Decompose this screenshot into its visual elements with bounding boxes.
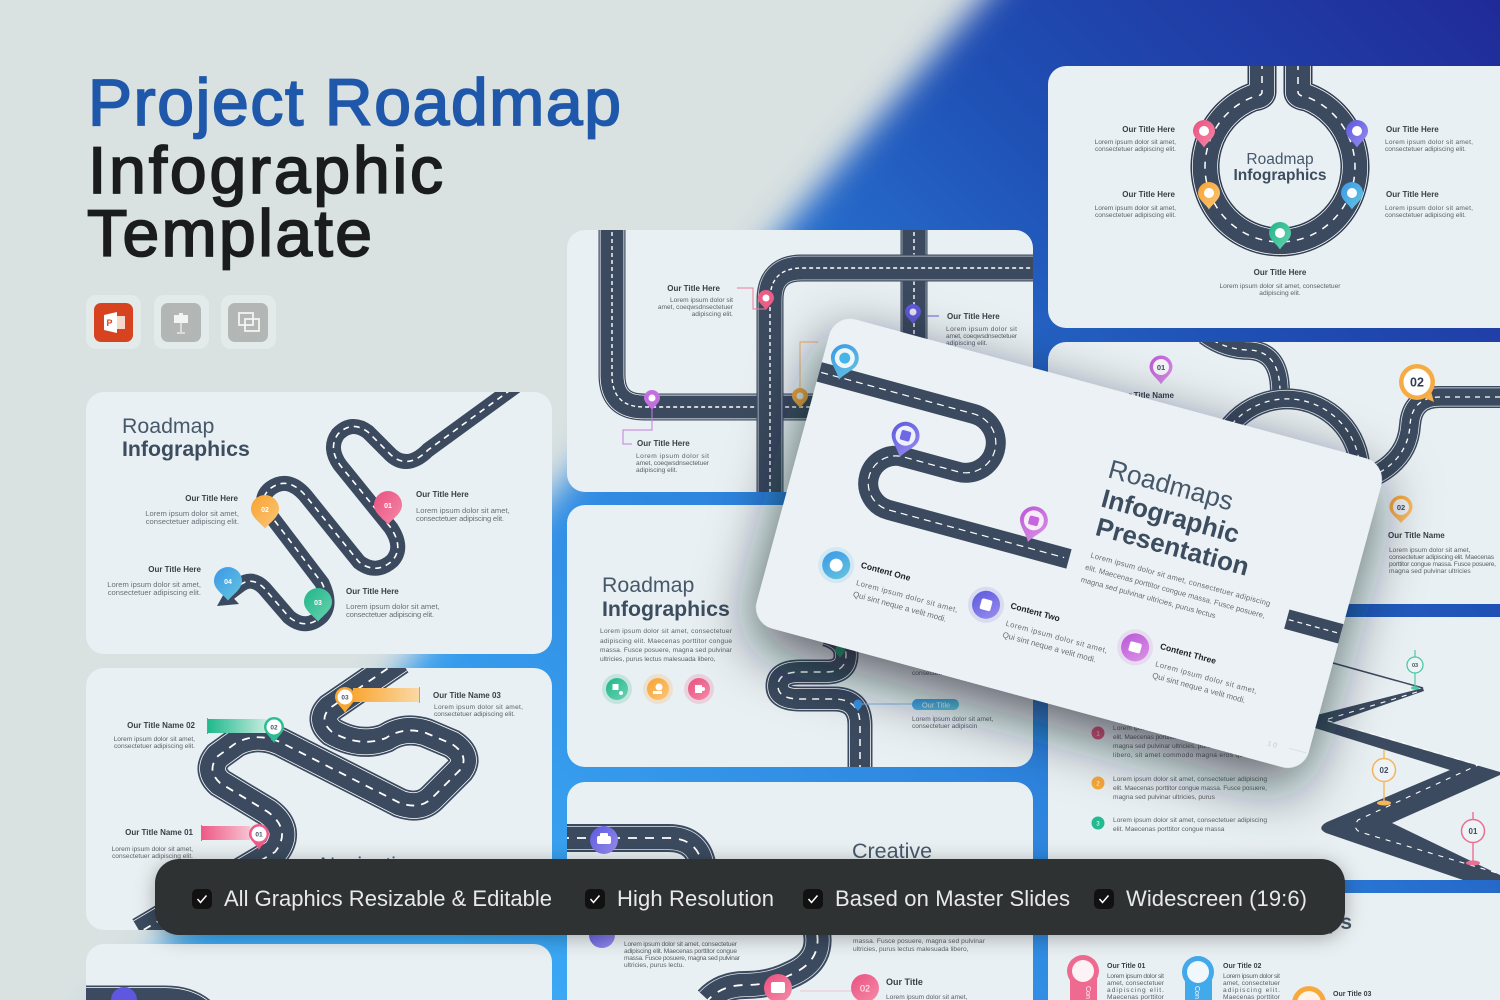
feature: resolution: High Resolution (617, 886, 774, 911)
bullet 3: 3 (1096, 822, 1100, 828)
pin: printer (1014, 503, 1051, 546)
text 02: adipiscing elit. (1223, 987, 1280, 994)
text blocks: consectetuer adipiscing elit. (1095, 146, 1176, 153)
panel: left slide bottom (86, 944, 552, 1000)
arrow head (217, 590, 239, 606)
text: bottom left: adipiscing elit. (636, 467, 678, 474)
content one: Qui sint neque a velit modi. (852, 590, 948, 624)
heading: Roadmaps (1105, 454, 1237, 516)
callout bar 03: 03 (341, 694, 349, 702)
text 02 (1223, 963, 1281, 1000)
heading: Infographics (602, 597, 730, 621)
text: top: Lorem ipsum dolor sit (670, 297, 733, 304)
text: right: Lorem ipsum dolor sit (946, 326, 1017, 333)
text 02: consectetuer adipiscing elit. (114, 743, 195, 750)
pin 02 small (1390, 496, 1412, 523)
text 03: consectetuer adipiscing elit. (346, 610, 434, 619)
panel: right slide zigzag road (1048, 617, 1500, 880)
text 01: consectetuer adipiscing elit. (416, 514, 504, 523)
bullet 1: elit. Maecenas porttitor congue massa. Fusce posuere, (1113, 734, 1267, 741)
icon: orange circle (643, 674, 673, 704)
icon: pink circle (684, 674, 714, 704)
pin: indigo (1346, 120, 1368, 148)
badge 01: Con (1084, 986, 1091, 999)
text left: ultricies, purus lectu. (624, 962, 684, 969)
pin 01: 01 (1157, 363, 1165, 372)
pin: indigo (905, 304, 921, 324)
road (228, 383, 520, 624)
text 03: Our Title Name 03 (433, 691, 501, 700)
pin: chart (825, 341, 862, 383)
text 02: Lorem ipsum dolor sit (1223, 973, 1280, 980)
heading (1233, 151, 1327, 184)
bullet 1: libero, sit amet commodo magna eros quis urna. (1113, 752, 1267, 759)
panel: middle slide intro (567, 505, 1033, 772)
page number (1266, 741, 1307, 758)
pin 04: 04 (224, 579, 232, 586)
icon: car badge (590, 826, 618, 854)
paragraph: massa. Fusce posuere, magna sed pulvinar (600, 647, 733, 654)
text blocks: Lorem ipsum dolor sit amet, (1385, 139, 1473, 146)
text 02: Lorem ipsum dolor sit amet, (145, 509, 239, 518)
callout pill: Our Title (922, 700, 950, 710)
road (778, 634, 860, 772)
heading: Creative (852, 839, 932, 863)
text 02: Our Title Name 02 (127, 721, 196, 730)
pin: violet (644, 390, 660, 410)
text blocks: Lorem ipsum dolor sit amet, (1095, 139, 1176, 146)
text 04: consectetuer adipiscing elit. (108, 588, 201, 597)
app icons (86, 295, 276, 349)
text: bottom left: amet, coeqwsdnsectetuer (636, 460, 710, 467)
content three (1111, 625, 1264, 707)
text: 02: magna sed pulvinar ultricies (1389, 568, 1471, 575)
content one (811, 543, 965, 626)
callout text: consectetuer (912, 670, 951, 677)
text right: massa. Fusce posuere, magna sed pulvinar (853, 938, 986, 945)
heading: Infographics (122, 437, 250, 461)
text blocks: Our Title Here (1386, 190, 1439, 199)
text blocks: Our Title Here (1386, 125, 1439, 134)
text 02: Our Title Here (185, 494, 239, 503)
text 03: Our Title 03 (1333, 991, 1371, 998)
text blocks: Lorem ipsum dolor sit amet, (1385, 205, 1473, 212)
content two: Qui sint neque a velit modi. (1002, 630, 1097, 664)
bullet list (1092, 725, 1267, 833)
pin 01 (1462, 812, 1484, 866)
text blocks: Our Title Here (1122, 190, 1176, 199)
text blocks: consectetuer adipiscing elit. (1385, 212, 1466, 219)
text right (853, 938, 986, 953)
panel: middle slide creative (560, 782, 1033, 1000)
callout pill (862, 699, 959, 710)
text right: ultricies, purus lectus malesuada libero, (853, 946, 969, 953)
badge 02: 02 (860, 984, 870, 994)
text 01: Our Title Here (416, 490, 469, 499)
pin 01: 01 (1469, 827, 1478, 836)
callout bar 03 (335, 687, 420, 713)
pin 03: 03 (314, 600, 322, 607)
heading: Roadmap (1246, 151, 1314, 168)
callout bar 01: 01 (255, 832, 263, 838)
text 02: amet, consectetuer (1223, 980, 1281, 987)
icon: PowerPoint: P (106, 318, 113, 328)
text: 01: Our Title Name (1117, 391, 1175, 400)
text: top (658, 284, 734, 318)
heading: Infographics (1233, 167, 1327, 184)
text: right: adipiscing elit. (946, 340, 988, 347)
text 01: amet, consectetuer (1107, 980, 1165, 987)
text: right: amet, coeqwsdnsectetuer (946, 333, 1018, 340)
content two (961, 583, 1115, 667)
text: top: adipiscing elit. (692, 311, 733, 318)
text 04 (107, 565, 202, 597)
text 03 (346, 587, 440, 619)
panel: left slide winding road (86, 383, 552, 654)
pin: blue (1341, 182, 1363, 210)
bullet 1: magna sed pulvinar ultricies, purus lectus malesuada (1113, 743, 1267, 750)
bullet 1 (1092, 725, 1267, 759)
text 01: Lorem ipsum dolor sit (1107, 973, 1164, 980)
title line: Template: Template (87, 196, 372, 270)
panel: middle slide crossing roads (567, 225, 1040, 500)
pin 02: 02 (1380, 766, 1389, 775)
icon: PowerPoint (86, 295, 141, 349)
feature: master slides: Based on Master Slides (835, 886, 1070, 911)
paragraph: ultricies, purus lectus malesuada libero, (600, 656, 716, 663)
pin 02 small: 02 (1397, 503, 1405, 512)
text 03: consectetuer adipiscing elit. (434, 711, 515, 718)
paragraph (1080, 550, 1271, 633)
text 03: Lorem ipsum dolor sit amet, (346, 602, 440, 611)
content one: Content One (860, 560, 912, 583)
badge 01 (1067, 955, 1099, 1000)
text 01 (1107, 963, 1165, 1000)
text blocks: consectetuer adipiscing elit. (1385, 146, 1466, 153)
heading (122, 414, 250, 461)
badge 03 (1292, 986, 1326, 1000)
pin 02 large (1399, 364, 1435, 402)
panel: right slide circle road (1048, 335, 1500, 604)
text 01: Our Title 01 (1107, 963, 1145, 970)
text left (624, 941, 741, 969)
zigzag road (1305, 663, 1500, 880)
text 03: Our Title Here (346, 587, 399, 596)
bullet 2: elit. Maecenas porttitor congue massa. Fusce posuere, (1113, 785, 1267, 792)
feature bar (155, 859, 1345, 935)
pin 03 (304, 588, 332, 622)
feature: resizable: All Graphics Resizable & Editable (224, 886, 552, 911)
text: right: Our Title Here (947, 312, 1000, 321)
text: 02: consectetuer adipiscing elit. Maecenas (1389, 554, 1495, 561)
text 04: Lorem ipsum dolor sit amet, (107, 580, 201, 589)
text 01: Our Title Name 01 (125, 828, 194, 837)
content three: Qui sint neque a velit modi. (1151, 671, 1247, 705)
text: 02 (1388, 531, 1496, 575)
title line: Infographic: Infographic (88, 133, 443, 207)
ring road (1205, 62, 1355, 242)
content two: Content Two (1009, 600, 1061, 623)
heading: Presentation (1093, 512, 1252, 582)
pin 02 (251, 495, 279, 529)
pins (835, 645, 862, 711)
heading: Infographic (1098, 483, 1243, 549)
text left: massa. Fusce posuere, magna sed pulvinar (624, 955, 741, 962)
text 02 (114, 721, 196, 750)
heading: Roadmap (122, 414, 214, 438)
pin: orange (792, 388, 808, 408)
text 01: adipiscing elit. (1107, 987, 1164, 994)
pin 03 (1407, 650, 1423, 690)
text blocks: Our Title Here (1254, 268, 1307, 277)
bullet 1: Lorem ipsum dolor sit amet, consectetuer adipiscing (1113, 725, 1267, 732)
heading: Roadmap (602, 573, 694, 597)
text blocks: consectetuer adipiscing elit. (1095, 212, 1176, 219)
hidden heading: Roadmaps (1245, 911, 1352, 934)
icon: Google Slides (221, 295, 276, 349)
text 01: Lorem ipsum dolor sit amet, (112, 846, 193, 853)
pin 03: 03 (1412, 663, 1418, 669)
callout bar 01 (201, 824, 269, 850)
pin 02 large: 02 (1410, 376, 1424, 390)
bullet 2: magna sed pulvinar ultricies, purus (1113, 794, 1216, 801)
pin 02: 02 (261, 507, 269, 514)
text 04: Our Title Here (148, 565, 202, 574)
paragraph: adipiscing elit. Maecenas porttitor congue (600, 638, 732, 645)
text blocks: Our Title Here (1122, 125, 1176, 134)
callout text: Lorem ipsum dolor sit amet, (912, 716, 994, 723)
pin 01 (1150, 356, 1172, 384)
paragraph: Lorem ipsum dolor sit amet, consectetuer (600, 628, 733, 635)
icon: Keynote (154, 295, 209, 349)
pin 02 (1372, 750, 1396, 806)
heading (1090, 454, 1268, 582)
panel: tilted main slide (741, 311, 1395, 775)
paragraph: Lorem ipsum dolor sit amet, consectetuer adipiscing (1090, 551, 1271, 608)
feature: widescreen: Widescreen (19:6) (1126, 886, 1307, 911)
paragraph: elit. Maecenas porttitor congue massa. Fusce posuere, (1084, 563, 1266, 620)
callout bar 02 (207, 717, 284, 743)
icon: bus badge (764, 974, 792, 1000)
roads (1205, 335, 1500, 475)
title (87, 65, 621, 270)
text 01: Lorem ipsum dolor sit amet, (416, 506, 510, 515)
roads (612, 225, 1040, 500)
badge 02: Con (1193, 986, 1200, 999)
icon: teal circle (602, 674, 632, 704)
page number: 1 0 (1266, 741, 1278, 750)
bullet 3: Lorem ipsum dolor sit amet, consectetuer adipiscing (1113, 817, 1267, 824)
paragraph: magna sed pulvinar ultricies, purus lectus (1080, 575, 1217, 620)
hidden heading: Navigation (320, 854, 419, 877)
text 01 (112, 828, 194, 860)
text: 02: Our Title Name (1388, 531, 1445, 540)
text 01: consectetuer adipiscing elit. (112, 853, 193, 860)
text blocks: Lorem ipsum dolor sit amet, consectetuer (1220, 283, 1341, 290)
text: 02: porttitor congue massa. Fusce posuere, (1389, 561, 1496, 568)
badge 02 (800, 974, 879, 1000)
text left: adipiscing elit. Maecenas porttitor congue (624, 948, 737, 955)
pin: orange (1198, 182, 1220, 210)
callout bar 02: 02 (270, 724, 278, 732)
text blocks: adipiscing elit. (1259, 290, 1301, 297)
text 03 (433, 691, 523, 718)
panel: left slide wide road (86, 660, 552, 932)
text: top: Our Title Here (667, 284, 721, 293)
text: bottom left: Lorem ipsum dolor sit (636, 453, 709, 460)
text blocks: Lorem ipsum dolor sit amet, (1095, 205, 1176, 212)
text left: Lorem ipsum dolor sit amet, consectetuer (624, 941, 738, 948)
road (779, 369, 1379, 636)
bullet 2: 2 (1096, 782, 1100, 788)
text 01 (416, 490, 510, 523)
pin: pink (758, 290, 774, 310)
title line: Project Roadmap: Project Roadmap (88, 65, 621, 139)
text 02 (145, 494, 239, 526)
content two: Lorem ipsum dolor sit amet, (1005, 619, 1108, 655)
text: 02: Lorem ipsum dolor sit amet, (1389, 547, 1471, 554)
content one: Lorem ipsum dolor sit amet, (855, 578, 959, 614)
road (560, 838, 818, 1000)
callout text (912, 670, 994, 730)
bullet 3 (1092, 816, 1267, 833)
text: bottom left: Our Title Here (637, 439, 690, 448)
text blocks (1095, 125, 1473, 297)
text 02: Our Title 02 (1223, 963, 1261, 970)
text: right (946, 312, 1018, 347)
bullet 2: Lorem ipsum dolor sit amet, consectetuer adipiscing (1113, 776, 1267, 783)
panel: right slide bottom (1048, 893, 1500, 1000)
content three: Content Three (1159, 641, 1218, 666)
road (140, 660, 464, 932)
callout text: consectetuer adipiscin (912, 723, 978, 730)
text: our title: Our Title (886, 977, 923, 987)
bullet 3: elit. Maecenas porttitor congue massa (1113, 826, 1225, 833)
pin: tablet (886, 419, 923, 461)
connector lines (623, 288, 939, 444)
text: top: amet, coeqwsdnsectetuer (658, 304, 734, 311)
icon: purple circle (589, 922, 615, 948)
pin 01: 01 (384, 503, 392, 510)
pin: pink (1193, 120, 1215, 148)
text: our title (886, 977, 968, 1000)
panel: right slide ring road (1048, 62, 1500, 328)
badge 02 (1182, 956, 1214, 1000)
pin 01 (374, 491, 402, 525)
paragraph (600, 628, 733, 663)
pin: teal (1269, 222, 1291, 250)
pin 04 (214, 567, 242, 601)
text 03: Lorem ipsum dolor sit amet, (434, 704, 523, 711)
text 02: Lorem ipsum dolor sit amet, (114, 736, 195, 743)
icon: car badge (111, 987, 137, 1000)
bullet 2 (1092, 776, 1267, 801)
content three: Lorem ipsum dolor sit amet, (1154, 659, 1258, 696)
heading (602, 573, 730, 621)
text: bottom left (636, 439, 710, 474)
bullet 1: 1 (1096, 732, 1100, 738)
text 02: consectetuer adipiscing elit. (146, 517, 239, 526)
